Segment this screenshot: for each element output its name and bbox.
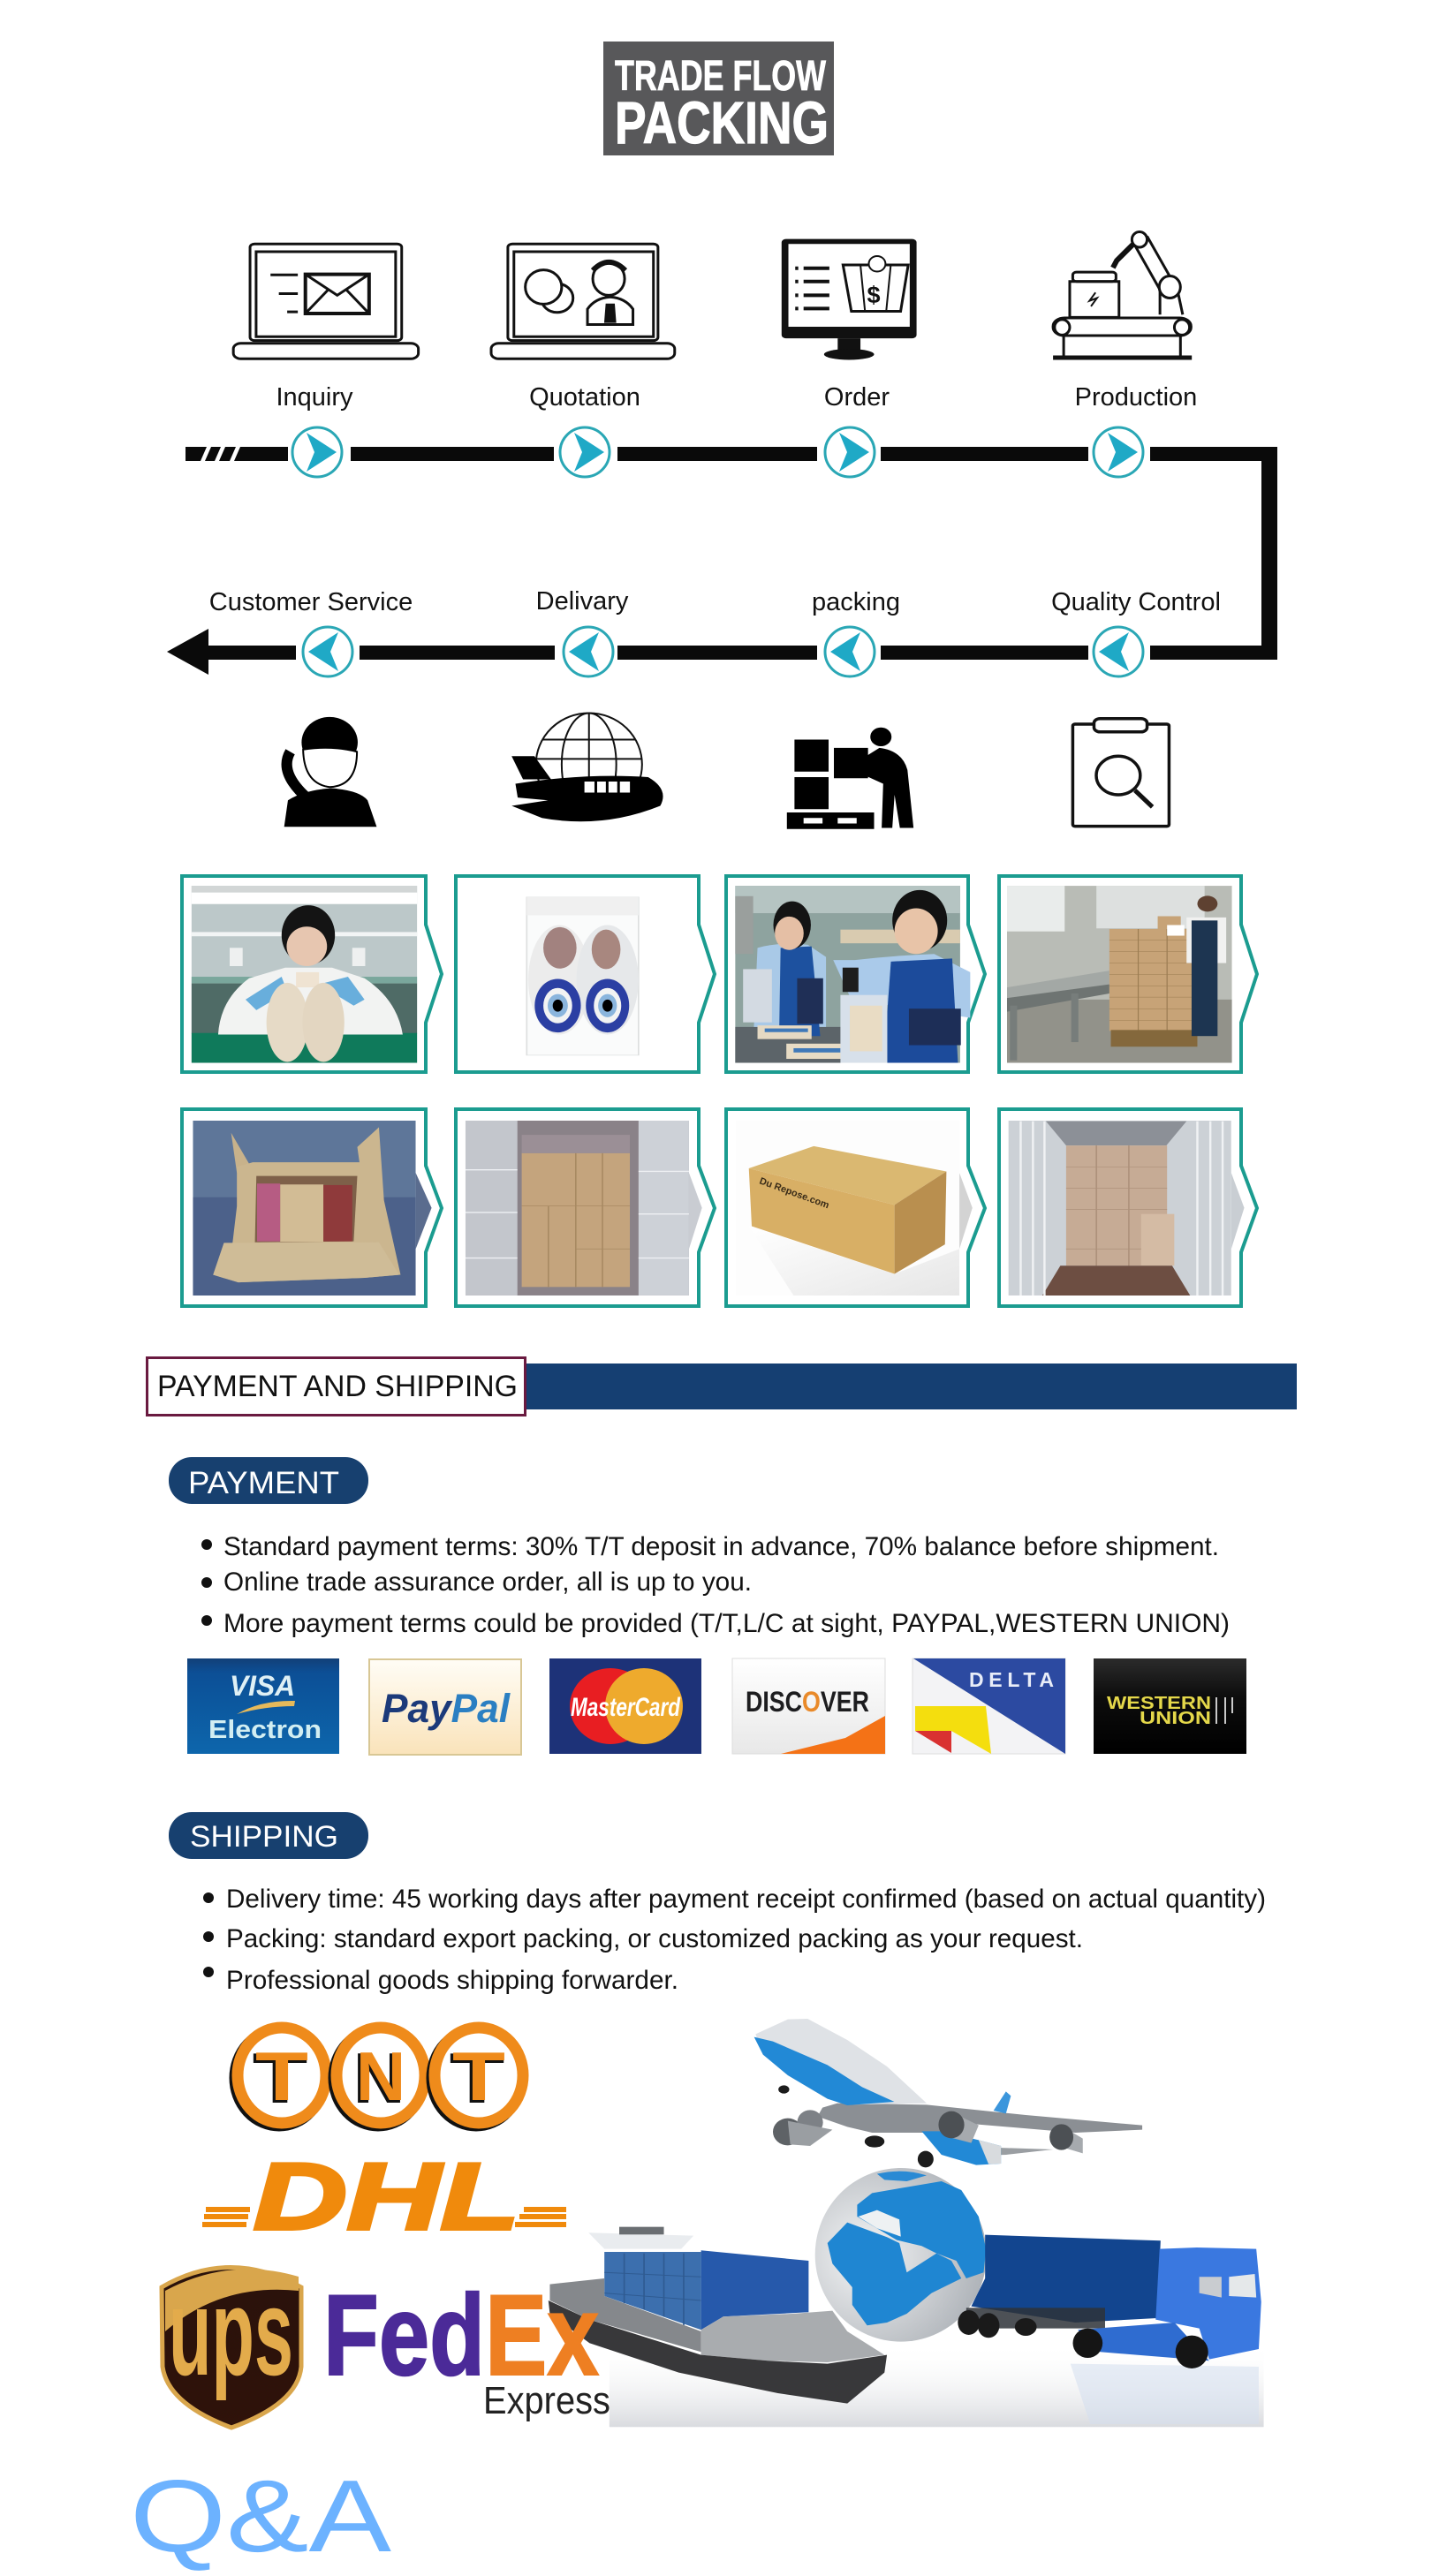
- title badge: PACKING: [615, 90, 829, 156]
- icon: order monitor: [782, 239, 917, 360]
- logo: PayPal: [369, 1659, 521, 1755]
- logo: TNT: N: [354, 2039, 404, 2117]
- title badge: TRADE FLOW: [615, 53, 827, 100]
- panel: palletising photo: [999, 876, 1257, 1072]
- panel: bagged slippers photo: [456, 876, 715, 1072]
- logo: TNT: T: [254, 2039, 307, 2117]
- icon: air freight plane and globe: [511, 714, 663, 821]
- photo: two workers bagging sandals: [735, 886, 970, 1063]
- step markers: forward arrows: [292, 427, 1143, 477]
- illustration: blue truck: [958, 2235, 1261, 2368]
- logo: Visa Electron: VISA: [230, 1670, 295, 1702]
- step labels: Production: [1075, 383, 1197, 412]
- step labels: Order: [824, 383, 890, 412]
- carton printed brand text: Du Repose.com: [758, 1176, 830, 1211]
- logo: PayPal: PayPal: [382, 1686, 511, 1731]
- logo: Visa Electron: [187, 1658, 339, 1754]
- icon: packing worker: [787, 728, 913, 829]
- icon: dollar sign on order monitor: $: [867, 282, 881, 308]
- photo: closed corrugated carton: [749, 1146, 973, 1296]
- panel: container interior photo: [999, 1109, 1257, 1306]
- payment terms list: More payment terms could be provided (T/T,L/C at sight, PAYPAL,WESTERN UNION): [223, 1609, 1230, 1638]
- step markers: backward arrows: [303, 627, 1143, 676]
- section heading: payment and shipping: PAYMENT AND SHIPPING: [157, 1370, 518, 1403]
- logo: Western Union: WESTERN: [1107, 1694, 1211, 1713]
- shipping terms list: [203, 1885, 1266, 1995]
- step labels: [209, 383, 1221, 616]
- logo: DHL: [202, 2143, 566, 2249]
- logo: FedEx Express: Ex: [485, 2270, 599, 2399]
- icon: production robot arm: [1053, 231, 1192, 358]
- icon: inquiry laptop: [233, 244, 419, 359]
- step labels: Delivary: [536, 587, 629, 616]
- logo: DHL: DHL: [254, 2143, 519, 2249]
- payment terms list: [201, 1532, 1230, 1638]
- logo: Delta: DELTA: [969, 1668, 1054, 1691]
- illustration: globe: [815, 2168, 987, 2342]
- logo: UPS shield: [162, 2262, 301, 2428]
- transport scene: reflective floor: [610, 2343, 1264, 2427]
- shipping terms list: Packing: standard export packing, or customized packing as your request.: [226, 1924, 1083, 1953]
- panel: carton box photo: [726, 1109, 985, 1306]
- photo: cartons stacked inside container: [1009, 1121, 1245, 1296]
- step labels: Quality Control: [1051, 588, 1221, 616]
- logo: UPS shield: ups: [169, 2262, 293, 2401]
- panel: inspection photo: [182, 876, 442, 1072]
- shipping terms list: Professional goods shipping forwarder.: [226, 1966, 678, 1995]
- flow line: black path with gaps: [167, 447, 1277, 675]
- logo: TNT: T: [452, 2037, 505, 2115]
- step labels: Customer Service: [209, 588, 413, 616]
- step labels: packing: [812, 588, 900, 616]
- photo: open carton on carpet: [193, 1121, 432, 1296]
- title badge: [603, 42, 834, 156]
- payment terms list: Online trade assurance order, all is up to you.: [223, 1568, 752, 1597]
- step labels: Quotation: [529, 383, 640, 412]
- photo: worker inspecting shoes: [192, 886, 417, 1063]
- logo: Visa Electron: Electron: [208, 1716, 322, 1744]
- illustration: jet airliner: [754, 2019, 1142, 2167]
- payment terms list: Standard payment terms: 30% T/T deposit in advance, 70% balance before shipment.: [223, 1532, 1219, 1561]
- pill heading: payment: [169, 1457, 368, 1504]
- logo: TNT: N: [356, 2037, 405, 2115]
- pill heading: shipping: [169, 1812, 368, 1859]
- icon: customer service agent: [284, 717, 376, 827]
- logo: Discover: [732, 1658, 885, 1754]
- logo: Discover: DISCOVER: [746, 1686, 869, 1718]
- photo: slippers in clear bag: [526, 897, 639, 1055]
- logo: TNT: T: [451, 2039, 504, 2117]
- heading: Q&A: Q&A: [130, 2459, 392, 2573]
- logo: Western Union: UNION: [1140, 1709, 1211, 1728]
- logo: FedEx Express: [323, 2270, 610, 2422]
- shipping terms list: Delivery time: 45 working days after payment receipt confirmed (based on actual quantity): [226, 1885, 1266, 1914]
- panel: open carton photo: [182, 1109, 442, 1306]
- section heading: payment and shipping: [147, 1358, 1297, 1415]
- pill heading: shipping: SHIPPING: [190, 1820, 338, 1854]
- logo: TNT: [235, 2028, 523, 2126]
- illustration: container ship: [549, 2227, 887, 2404]
- logo: FedEx Express: Express: [483, 2379, 610, 2422]
- logo: Delta: [913, 1658, 1065, 1754]
- panel: container doors photo: [456, 1109, 715, 1306]
- photo: loaded container with open doors: [466, 1121, 702, 1296]
- logo: MasterCard: [549, 1658, 701, 1754]
- pill heading: payment: PAYMENT: [188, 1466, 339, 1500]
- icon: quotation laptop: [491, 244, 675, 359]
- step labels: Inquiry: [276, 383, 353, 412]
- photo: worker stacking cartons: [1007, 886, 1232, 1063]
- icon: quality control clipboard: [1072, 719, 1169, 827]
- logo: TNT: T: [255, 2037, 308, 2115]
- panel: bagging photo: [726, 876, 985, 1072]
- logo: MasterCard: MasterCard: [571, 1693, 681, 1722]
- logo: FedEx Express: Fed: [323, 2270, 485, 2399]
- logo: Western Union: [1094, 1658, 1246, 1754]
